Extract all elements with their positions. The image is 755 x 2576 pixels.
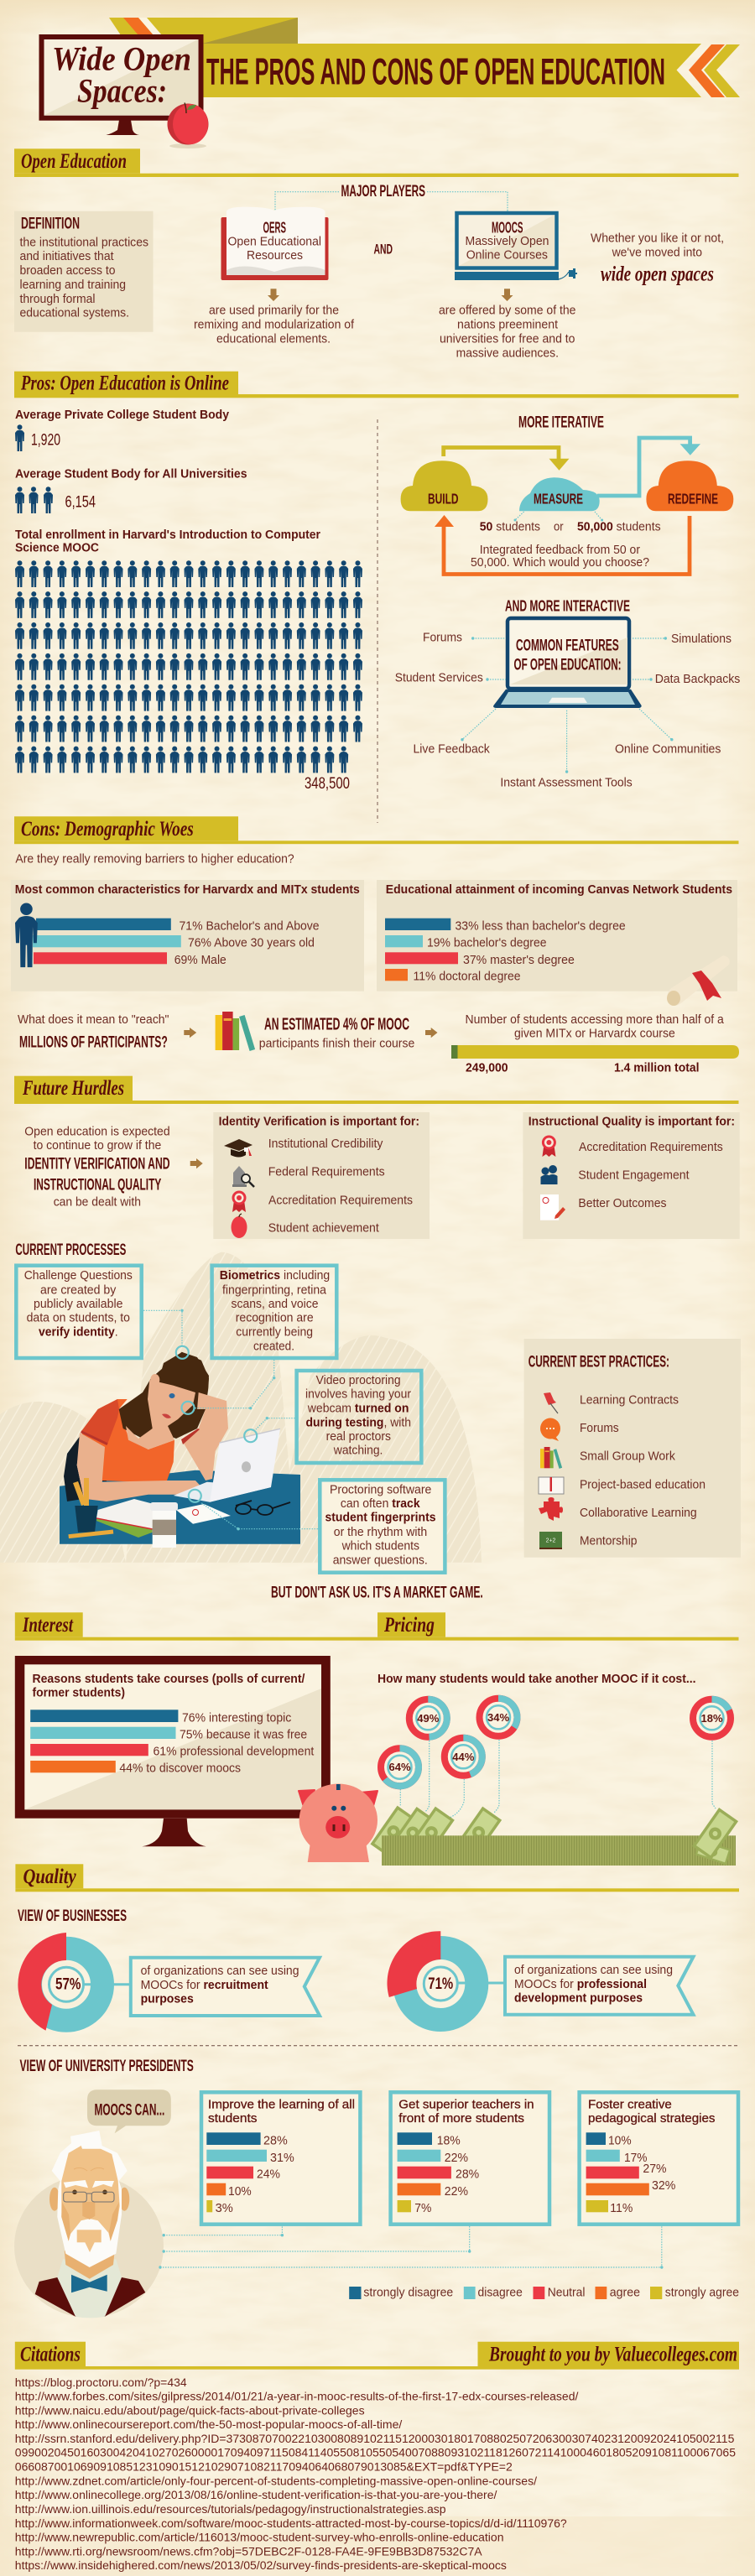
callout: wide open spaces: we've moved into <box>612 247 702 260</box>
stat: all universities student body: Average Student Body for All Universities <box>15 468 247 481</box>
text: MOOCS description: universities for free and to <box>440 332 575 346</box>
callout: professional development: development purposes <box>514 1992 643 2006</box>
panel: identity verification: Student achievement <box>268 1222 379 1236</box>
callout: proctoring software <box>320 1480 445 1573</box>
heading: market game: BUT DON'T ASK US. IT'S A MARKET GAME. <box>271 1583 483 1601</box>
panel: superior teachers <box>391 2092 549 2225</box>
illustration: stack of money <box>370 1806 738 1866</box>
panel: current best practices: Learning Contracts <box>580 1394 679 1408</box>
callout: proctoring software: which students <box>341 1540 419 1553</box>
callout: video proctoring: Video proctoring <box>316 1374 401 1387</box>
text: OERS description: are used primarily for the <box>209 304 339 318</box>
panel: identity verification: Institutional Credibility <box>268 1137 383 1151</box>
icon: chalkboard <box>539 1532 562 1549</box>
arrow: down from OERS <box>268 289 279 301</box>
heading: MOOC pricing question: How many students would take another MOOC if it cost... <box>378 1673 696 1686</box>
cloud: measure <box>519 477 600 511</box>
callout: recruitment: MOOCs for recruitment <box>141 1979 268 1992</box>
number: 348,500: 348,500 <box>305 775 350 793</box>
citation list: http://www.forbes.com/sites/gilpress/2014/01/21/a-year-in-mooc-results-of-the-first-17-edx-courses-released/ <box>15 2391 579 2403</box>
text: students compare: 50,000. Which would you choose? <box>471 556 649 570</box>
panel: superior teachers: 7% <box>414 2202 431 2215</box>
cloud: redefine <box>646 461 733 511</box>
section header: Quality <box>15 1864 739 1892</box>
feature labels: Student Services <box>395 672 483 685</box>
panel: reasons monitor: 61% professional development <box>153 1746 314 1759</box>
callout: video proctoring: webcam turned on <box>307 1402 409 1415</box>
section header: Interest and Pricing <box>15 1612 739 1641</box>
citation list: http://www.onlinecoursereport.com/the-50-most-popular-moocs-of-all-time/ <box>15 2418 403 2431</box>
stat: private college student body: 1,920 <box>31 432 60 450</box>
panel: definition: through formal <box>20 293 96 306</box>
panel: instructional quality <box>523 1112 740 1239</box>
icon: diploma <box>667 955 730 1006</box>
citation list: http://www.naicu.edu/about/page/quick-facts-about-private-colleges <box>15 2404 365 2417</box>
panel: improve learning: Improve the learning of all <box>208 2098 355 2111</box>
stat: private college student body: Average Private College Student Body <box>15 409 229 422</box>
panel: instructional quality: Instructional Quality is important for: <box>528 1116 735 1129</box>
callout: proctoring software: Proctoring software <box>330 1483 431 1496</box>
donut: 64%: 64% <box>388 1761 411 1773</box>
text: students compare: 50,000 students <box>577 520 661 533</box>
legend: Neutral <box>548 2287 586 2300</box>
connectors <box>143 1309 318 1530</box>
text: future growth <box>24 1125 170 1209</box>
text: OERS description: educational elements. <box>216 332 331 346</box>
panel: current best practices: CURRENT BEST PRACTICES: <box>528 1352 669 1371</box>
arrow: build to measure <box>444 448 569 471</box>
panel: current best practices: Collaborative Learning <box>580 1507 697 1520</box>
icon: OERS open book <box>221 207 329 280</box>
icon: accreditation ribbon <box>232 1191 247 1212</box>
legend: agree <box>610 2287 640 2300</box>
stat: 4% finish: AN ESTIMATED 4% OF MOOC <box>264 1015 409 1033</box>
speech bubble: MOOCs can: MOOCS CAN... <box>94 2101 164 2120</box>
panel: Canvas Network attainment: 19% bachelor's degree <box>427 936 547 950</box>
callout: recruitment: of organizations can see using <box>141 1965 299 1978</box>
donut: 18%: 18% <box>700 1712 723 1725</box>
feature labels: Forums <box>423 631 462 644</box>
panel: creative strategies: pedagogical strategies <box>588 2112 715 2126</box>
feature labels: Live Feedback <box>413 743 491 757</box>
illustration: piggy bank <box>299 1783 378 1862</box>
panel: Canvas Network attainment: 11% doctoral degree <box>413 971 521 984</box>
panel: Canvas Network attainment: 33% less than bachelor's degree <box>455 919 626 933</box>
text: MOOCS description: massive audiences. <box>456 346 559 360</box>
arrow: down from MOOCS <box>502 289 513 301</box>
callout: video proctoring: involves having your <box>305 1388 411 1402</box>
arrow: to identity panel <box>190 1158 203 1168</box>
legend: disagree <box>478 2287 523 2300</box>
section header: Open Education: Open Education <box>21 150 127 173</box>
stat heading: Harvard MOOC enrollment <box>15 528 320 555</box>
panel: superior teachers: Get superior teachers in <box>398 2098 534 2111</box>
panel: improve learning: 31% <box>270 2152 294 2165</box>
callout: biometrics <box>212 1266 336 1358</box>
cloud: redefine: REDEFINE <box>668 491 718 507</box>
panel: definition: the institutional practices <box>20 236 148 249</box>
monitor sign <box>42 37 201 135</box>
icon: MOOCS laptop: Massively Open <box>465 235 549 248</box>
panel: Harvardx and MITx characteristics: Most common characteristics for Harvardx and MITx students <box>15 883 360 897</box>
stat: students accessing half of course: 1.4 million total <box>614 1061 700 1075</box>
panel: improve learning <box>201 2092 360 2225</box>
callout: video proctoring <box>297 1371 421 1463</box>
panel: identity verification: Identity Verification is important for: <box>219 1116 419 1129</box>
callout: reach question: MILLIONS OF PARTICIPANTS? <box>19 1033 168 1051</box>
section header: Quality: Quality <box>23 1866 76 1888</box>
callout: reach question <box>18 1013 169 1051</box>
title banner <box>42 18 740 148</box>
section header: Citations: Citations <box>20 2343 81 2365</box>
donut: 34%: 34% <box>487 1711 509 1724</box>
stat heading: Harvard MOOC enrollment: Total enrollment in Harvard's Introduction to Computer <box>15 528 320 542</box>
icon: federal building and magnifier <box>232 1166 254 1187</box>
icon: MOOCS laptop: MOOCS <box>492 219 523 236</box>
monitor sign: Spaces: <box>77 72 167 110</box>
legend: strongly disagree <box>363 2287 453 2300</box>
citation list <box>15 2376 736 2572</box>
text: students compare <box>471 520 661 570</box>
diagram: common features laptop: OF OPEN EDUCATION: <box>513 656 621 674</box>
section header: Pros: Pros: Open Education is Online <box>20 372 229 394</box>
panel: creative strategies: 17% <box>624 2152 648 2165</box>
callout: video proctoring: watching. <box>333 1444 383 1458</box>
callout: challenge questions: Challenge Questions <box>24 1269 133 1283</box>
icon: notebook <box>539 1477 564 1494</box>
donut: 71% development: 71% <box>428 1975 453 1993</box>
panel: Harvardx and MITx characteristics: 76% Above 30 years old <box>188 936 315 950</box>
cloud: measure: MEASURE <box>534 491 583 507</box>
panel: definition: DEFINITION <box>21 214 80 232</box>
callout: biometrics: currently being <box>236 1325 313 1339</box>
panel: definition <box>14 211 153 332</box>
callout: professional development: of organizations can see using <box>514 1964 673 1977</box>
panel: identity verification: Federal Requirements <box>268 1166 385 1179</box>
callout: biometrics: created. <box>253 1340 294 1353</box>
panel: improve learning: 10% <box>228 2185 252 2199</box>
text: future growth: IDENTITY VERIFICATION AND <box>24 1154 170 1173</box>
stat: students accessing half of course: 249,000 <box>466 1061 508 1075</box>
icon: MOOCS laptop <box>455 213 577 280</box>
text: future growth: to continue to grow if the <box>34 1139 161 1153</box>
feature labels: Data Backpacks <box>655 673 740 686</box>
connectors: president to panels <box>159 2226 664 2269</box>
cloud: build <box>401 461 488 511</box>
callout: challenge questions: are created by <box>40 1283 117 1297</box>
panel: instructional quality: Student Engagement <box>578 1168 690 1182</box>
legend: strongly agree <box>665 2287 739 2300</box>
panel: reasons monitor: Reasons students take courses (polls of current/ <box>32 1673 305 1686</box>
donut: 49% <box>409 1699 447 1737</box>
callout: wide open spaces: wide open spaces <box>601 263 714 285</box>
feature labels: Online Communities <box>615 743 721 757</box>
text: barriers question: Are they really removing barriers to higher education? <box>15 852 294 866</box>
arrow: measure to redefine <box>597 438 700 496</box>
icon: OERS open book: Open Educational <box>228 235 321 248</box>
panel: instructional quality: Better Outcomes <box>578 1197 666 1210</box>
donut: 57% recruitment <box>18 1933 130 2031</box>
callout: video proctoring: during testing, with <box>305 1416 411 1429</box>
feature labels: Instant Assessment Tools <box>500 776 633 789</box>
text: MOOCS description: are offered by some of the <box>439 304 575 318</box>
stat: all universities student body: 6,154 <box>65 493 96 511</box>
section header: Pros <box>14 372 738 398</box>
text: MOOCS description: nations preeminent <box>457 319 558 332</box>
donut: 44%: 44% <box>452 1751 475 1763</box>
callout: professional development: MOOCs for professional <box>514 1978 647 1991</box>
citation list: http://www.onlinecollege.org/2013/08/16/online-student-verification-is-that-you-are-you-there/ <box>15 2489 497 2501</box>
panel: creative strategies: Foster creative <box>588 2098 672 2111</box>
stat: students accessing half of course <box>451 1013 739 1075</box>
panel: current best practices: Forums <box>580 1422 619 1435</box>
text: MOOCS description <box>439 304 575 360</box>
section header: Cons: Cons: Demographic Woes <box>21 818 194 840</box>
icon: OERS open book: OERS <box>263 219 286 236</box>
label: AND: AND <box>374 241 393 257</box>
diagram: common features laptop: COMMON FEATURES <box>516 637 619 654</box>
icon: books <box>216 1012 255 1051</box>
citation list: https://blog.proctoru.com/?p=434 <box>15 2376 187 2389</box>
icon: graduation cap <box>224 1139 253 1158</box>
pictogram: 348,500 students <box>15 560 362 773</box>
stat: students accessing half of course: given MITx or Harvardx course <box>514 1028 675 1041</box>
callout: challenge questions: verify identity. <box>39 1325 118 1339</box>
text: future growth: Open education is expected <box>24 1125 170 1138</box>
callout: proctoring software: or the rhythm with <box>334 1526 427 1539</box>
citation list: http://ssrn.stanford.edu/delivery.php?ID=373087070022103008089102115120003018017088025072063003074023120092024105002115 <box>15 2433 734 2445</box>
icon: people <box>540 1165 557 1184</box>
text: students compare: 50 students <box>480 520 540 533</box>
panel: current best practices: Small Group Work <box>580 1450 676 1464</box>
cloud: build: BUILD <box>428 491 458 507</box>
panel: improve learning: students <box>208 2112 257 2126</box>
panel: superior teachers: 18% <box>437 2135 461 2148</box>
citation list: http://www.ion.uillinois.edu/resources/tutorials/pedagogy/instructionalstrategies.asp <box>15 2503 446 2516</box>
heading: current processes: CURRENT PROCESSES <box>15 1241 126 1259</box>
panel: instructional quality: Accreditation Requirements <box>579 1141 723 1154</box>
icon: chalkboard: 2+2 <box>546 1538 556 1543</box>
citation list: http://www.informationweek.com/software/mooc-students-attracted-most-by-course-topics/d/d-id/1110976? <box>15 2517 567 2530</box>
section header: Interest and Pricing: Interest <box>22 1614 74 1637</box>
panel: identity verification <box>213 1112 430 1239</box>
panel: reasons monitor: 75% because it was free <box>180 1728 307 1741</box>
panel: improve learning: 28% <box>263 2135 288 2148</box>
panel: Harvardx and MITx characteristics: 69% Male <box>174 954 226 967</box>
panel: improve learning: 24% <box>257 2168 280 2182</box>
icon: books <box>540 1447 562 1469</box>
donut: 49%: 49% <box>417 1712 440 1725</box>
donut: 57% recruitment: 57% <box>55 1975 81 1994</box>
icon: puzzle piece <box>539 1497 563 1521</box>
callout: proctoring software: can often track <box>341 1497 420 1511</box>
illustration: university president <box>14 2131 164 2318</box>
heading: more iterative: MORE ITERATIVE <box>518 413 604 431</box>
callout: wide open spaces: Whether you like it or not, <box>591 232 724 246</box>
panel: current best practices: Project-based education <box>580 1478 706 1491</box>
callout: biometrics: recognition are <box>236 1312 314 1325</box>
text: OERS description: remixing and modularization of <box>194 319 355 332</box>
panel: creative strategies: 11% <box>610 2202 633 2215</box>
citation list: 066087001069091085123109015121029071082117094064068079013085&EXT=pdf&TYPE=2 <box>15 2461 513 2474</box>
panel: definition: educational systems. <box>20 307 129 320</box>
text: students compare: or <box>554 520 564 533</box>
citation list: https://www.insidehighered.com/news/2013/05/02/survey-finds-presidents-are-skeptical-moocs <box>15 2559 507 2572</box>
major players heading and connectors: MAJOR PLAYERS <box>341 182 425 200</box>
citation list: http://www.rti.org/newsroom/news.cfm?obj=57DEBC2F-0128-FA4E-9FE9BB3D87532C7A <box>15 2545 482 2558</box>
icon: apple <box>232 1214 247 1238</box>
icon: OERS open book: Resources <box>247 249 303 263</box>
feature labels: Simulations <box>671 632 732 646</box>
donut: 64% <box>381 1748 419 1786</box>
panel: reasons monitor: 76% interesting topic <box>182 1711 291 1725</box>
panel: creative strategies: 32% <box>652 2179 675 2193</box>
panel: superior teachers: 22% <box>445 2185 468 2199</box>
section header: Cons <box>14 816 738 844</box>
callout: recruitment: purposes <box>141 1993 194 2006</box>
section header: Open Education <box>14 148 738 177</box>
panel: reasons monitor: former students) <box>32 1687 125 1700</box>
citation list: http://www.newrepublic.com/article/116013/mooc-student-survey-who-enrolls-online-education <box>15 2532 504 2544</box>
arrow: redefine to build <box>435 515 690 574</box>
callout: professional development <box>505 1957 693 2015</box>
callout: reach question: What does it mean to "reach" <box>18 1013 169 1027</box>
heading: and more interactive: AND MORE INTERACTIVE <box>505 597 630 615</box>
callout: biometrics: scans, and voice <box>232 1298 319 1311</box>
callout: challenge questions <box>16 1266 142 1358</box>
panel: superior teachers: front of more students <box>398 2112 524 2126</box>
panel: current best practices <box>524 1339 741 1558</box>
legend <box>349 2287 739 2300</box>
icon: forum bubble <box>540 1418 560 1441</box>
callout: biometrics: Biometrics including <box>220 1269 330 1283</box>
citation list: http://www.zdnet.com/article/only-four-percent-of-students-completing-massive-open-online-courses/ <box>15 2475 537 2487</box>
panel: superior teachers: 28% <box>456 2168 479 2182</box>
panel: identity verification: Accreditation Requirements <box>268 1194 413 1207</box>
text: students compare: Integrated feedback from 50 or <box>480 544 640 557</box>
panel: creative strategies: 10% <box>608 2135 632 2148</box>
stat: all universities student body <box>15 468 247 513</box>
callout: challenge questions: publicly available <box>34 1298 122 1311</box>
monitor sign: Wide Open <box>52 39 191 77</box>
text: future growth: INSTRUCTIONAL QUALITY <box>34 1175 161 1194</box>
panel: definition: and initiatives that <box>20 250 114 263</box>
panel: superior teachers: 22% <box>445 2152 468 2165</box>
stat: students accessing half of course: Number of students accessing more than half of a <box>465 1013 725 1027</box>
donut: 44% <box>445 1738 482 1776</box>
panel: Canvas Network attainment <box>377 880 737 991</box>
chart: price donuts <box>381 1699 731 1818</box>
icon: push pin <box>544 1392 558 1413</box>
section header: Future Hurdles <box>14 1076 738 1104</box>
panel: creative strategies: 27% <box>643 2162 667 2176</box>
text: OERS description <box>194 304 355 346</box>
callout: proctoring software: answer questions. <box>333 1553 428 1567</box>
icon: MOOCS laptop: Online Courses <box>466 248 548 262</box>
diagram: build measure redefine loop <box>401 438 733 574</box>
panel: definition: learning and training <box>20 278 126 292</box>
panel: definition: broaden access to <box>20 264 116 278</box>
panel: Canvas Network attainment: Educational attainment of incoming Canvas Network Students <box>386 883 732 897</box>
panel: Canvas Network attainment: 37% master's degree <box>463 954 575 967</box>
callout: challenge questions: data on students, to <box>27 1312 130 1325</box>
callout: video proctoring: real proctors <box>326 1430 391 1444</box>
icon: accreditation ribbon <box>542 1136 556 1157</box>
icon: graded paper and pencil <box>540 1194 565 1220</box>
feature labels <box>395 631 740 789</box>
stat: private college student body <box>15 409 229 451</box>
panel: current best practices: Mentorship <box>580 1534 638 1548</box>
stat heading: Harvard MOOC enrollment: Science MOOC <box>15 542 100 555</box>
panel: reasons monitor: 44% to discover moocs <box>119 1762 241 1776</box>
diagram: common features laptop <box>395 618 740 789</box>
section header: Citations <box>15 2342 739 2370</box>
major players heading and connectors <box>273 182 508 213</box>
panel: Harvardx and MITx characteristics <box>11 880 364 991</box>
donut: 34% <box>480 1699 517 1736</box>
panel: improve learning: 3% <box>216 2202 233 2215</box>
stat: 4% finish <box>259 1015 414 1050</box>
panel: reasons monitor <box>15 1656 331 1846</box>
callout: recruitment <box>131 1958 320 2016</box>
icon: apple <box>168 102 208 148</box>
arrow: to four percent stat <box>184 1028 196 1038</box>
speech bubble: MOOCs can <box>87 2089 171 2133</box>
illustration: student at laptop <box>60 1346 300 1548</box>
callout: biometrics: fingerprinting, retina <box>222 1283 327 1297</box>
section header: Interest and Pricing: Pricing <box>383 1614 435 1637</box>
citation list: 099002045016030042041027026000017094097115084114055081055054007088093102118126072114100046018052091081100067065 <box>15 2447 736 2459</box>
panel: creative strategies <box>580 2092 738 2225</box>
text: future growth: can be dealt with <box>54 1195 141 1209</box>
heading: view of businesses: VIEW OF BUSINESSES <box>18 1907 127 1925</box>
heading: view of university presidents: VIEW OF UNIVERSITY PRESIDENTS <box>20 2057 194 2075</box>
section header: Future Hurdles: Future Hurdles <box>22 1077 124 1100</box>
arrow: to access stat <box>425 1028 438 1038</box>
donut: 71% development <box>388 1931 503 2020</box>
stat: 4% finish: participants finish their course <box>259 1037 414 1050</box>
callout: wide open spaces <box>591 232 724 285</box>
callout: proctoring software: student fingerprints <box>325 1512 436 1525</box>
donut: 18% <box>693 1699 731 1737</box>
panel: Harvardx and MITx characteristics: 71% Bachelor's and Above <box>180 919 320 933</box>
background hills <box>0 1252 482 1563</box>
